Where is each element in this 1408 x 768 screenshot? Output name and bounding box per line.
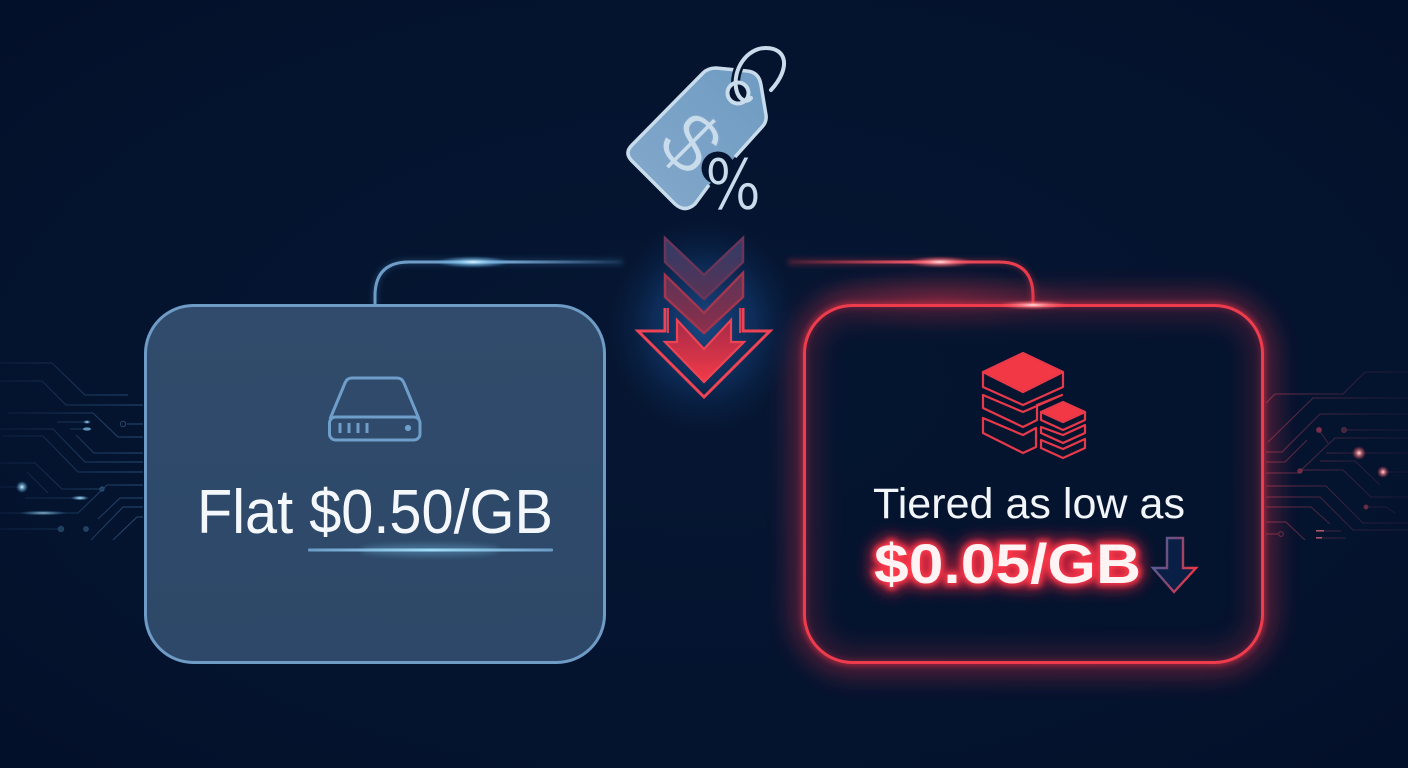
chevron: faint [665,238,743,299]
circuit pattern: right [1266,372,1408,540]
percent sign: % [705,145,761,226]
label: flat price: Flat $0.50/GB [197,478,553,547]
panel: flat pricing [146,306,604,662]
label: tiered price: $0.05/GB [874,532,1141,595]
label: tiered intro: Tiered as low as [873,480,1185,528]
connector: left card to arrow [375,256,623,305]
icon: tiered storage stacks [983,353,1085,458]
connector: right card to arrow [788,256,1070,332]
label: tiered price: $0.05/GB [874,532,1141,595]
underline: price [308,544,553,556]
label: tiered price: $0.05/GB [874,532,1141,595]
arrow: outer outline [638,308,770,397]
icon: small down arrow [1153,538,1196,592]
tag ring [728,48,784,104]
icon: descending arrows [608,219,800,431]
arrow: inner solid [665,320,744,382]
panel: tiered pricing [804,300,1262,662]
dollar sign: $ [642,93,741,192]
circuit pattern: left [0,363,143,540]
chevron: medium [665,273,743,333]
icon: price tag [628,48,784,226]
icon: storage drive [330,378,420,440]
